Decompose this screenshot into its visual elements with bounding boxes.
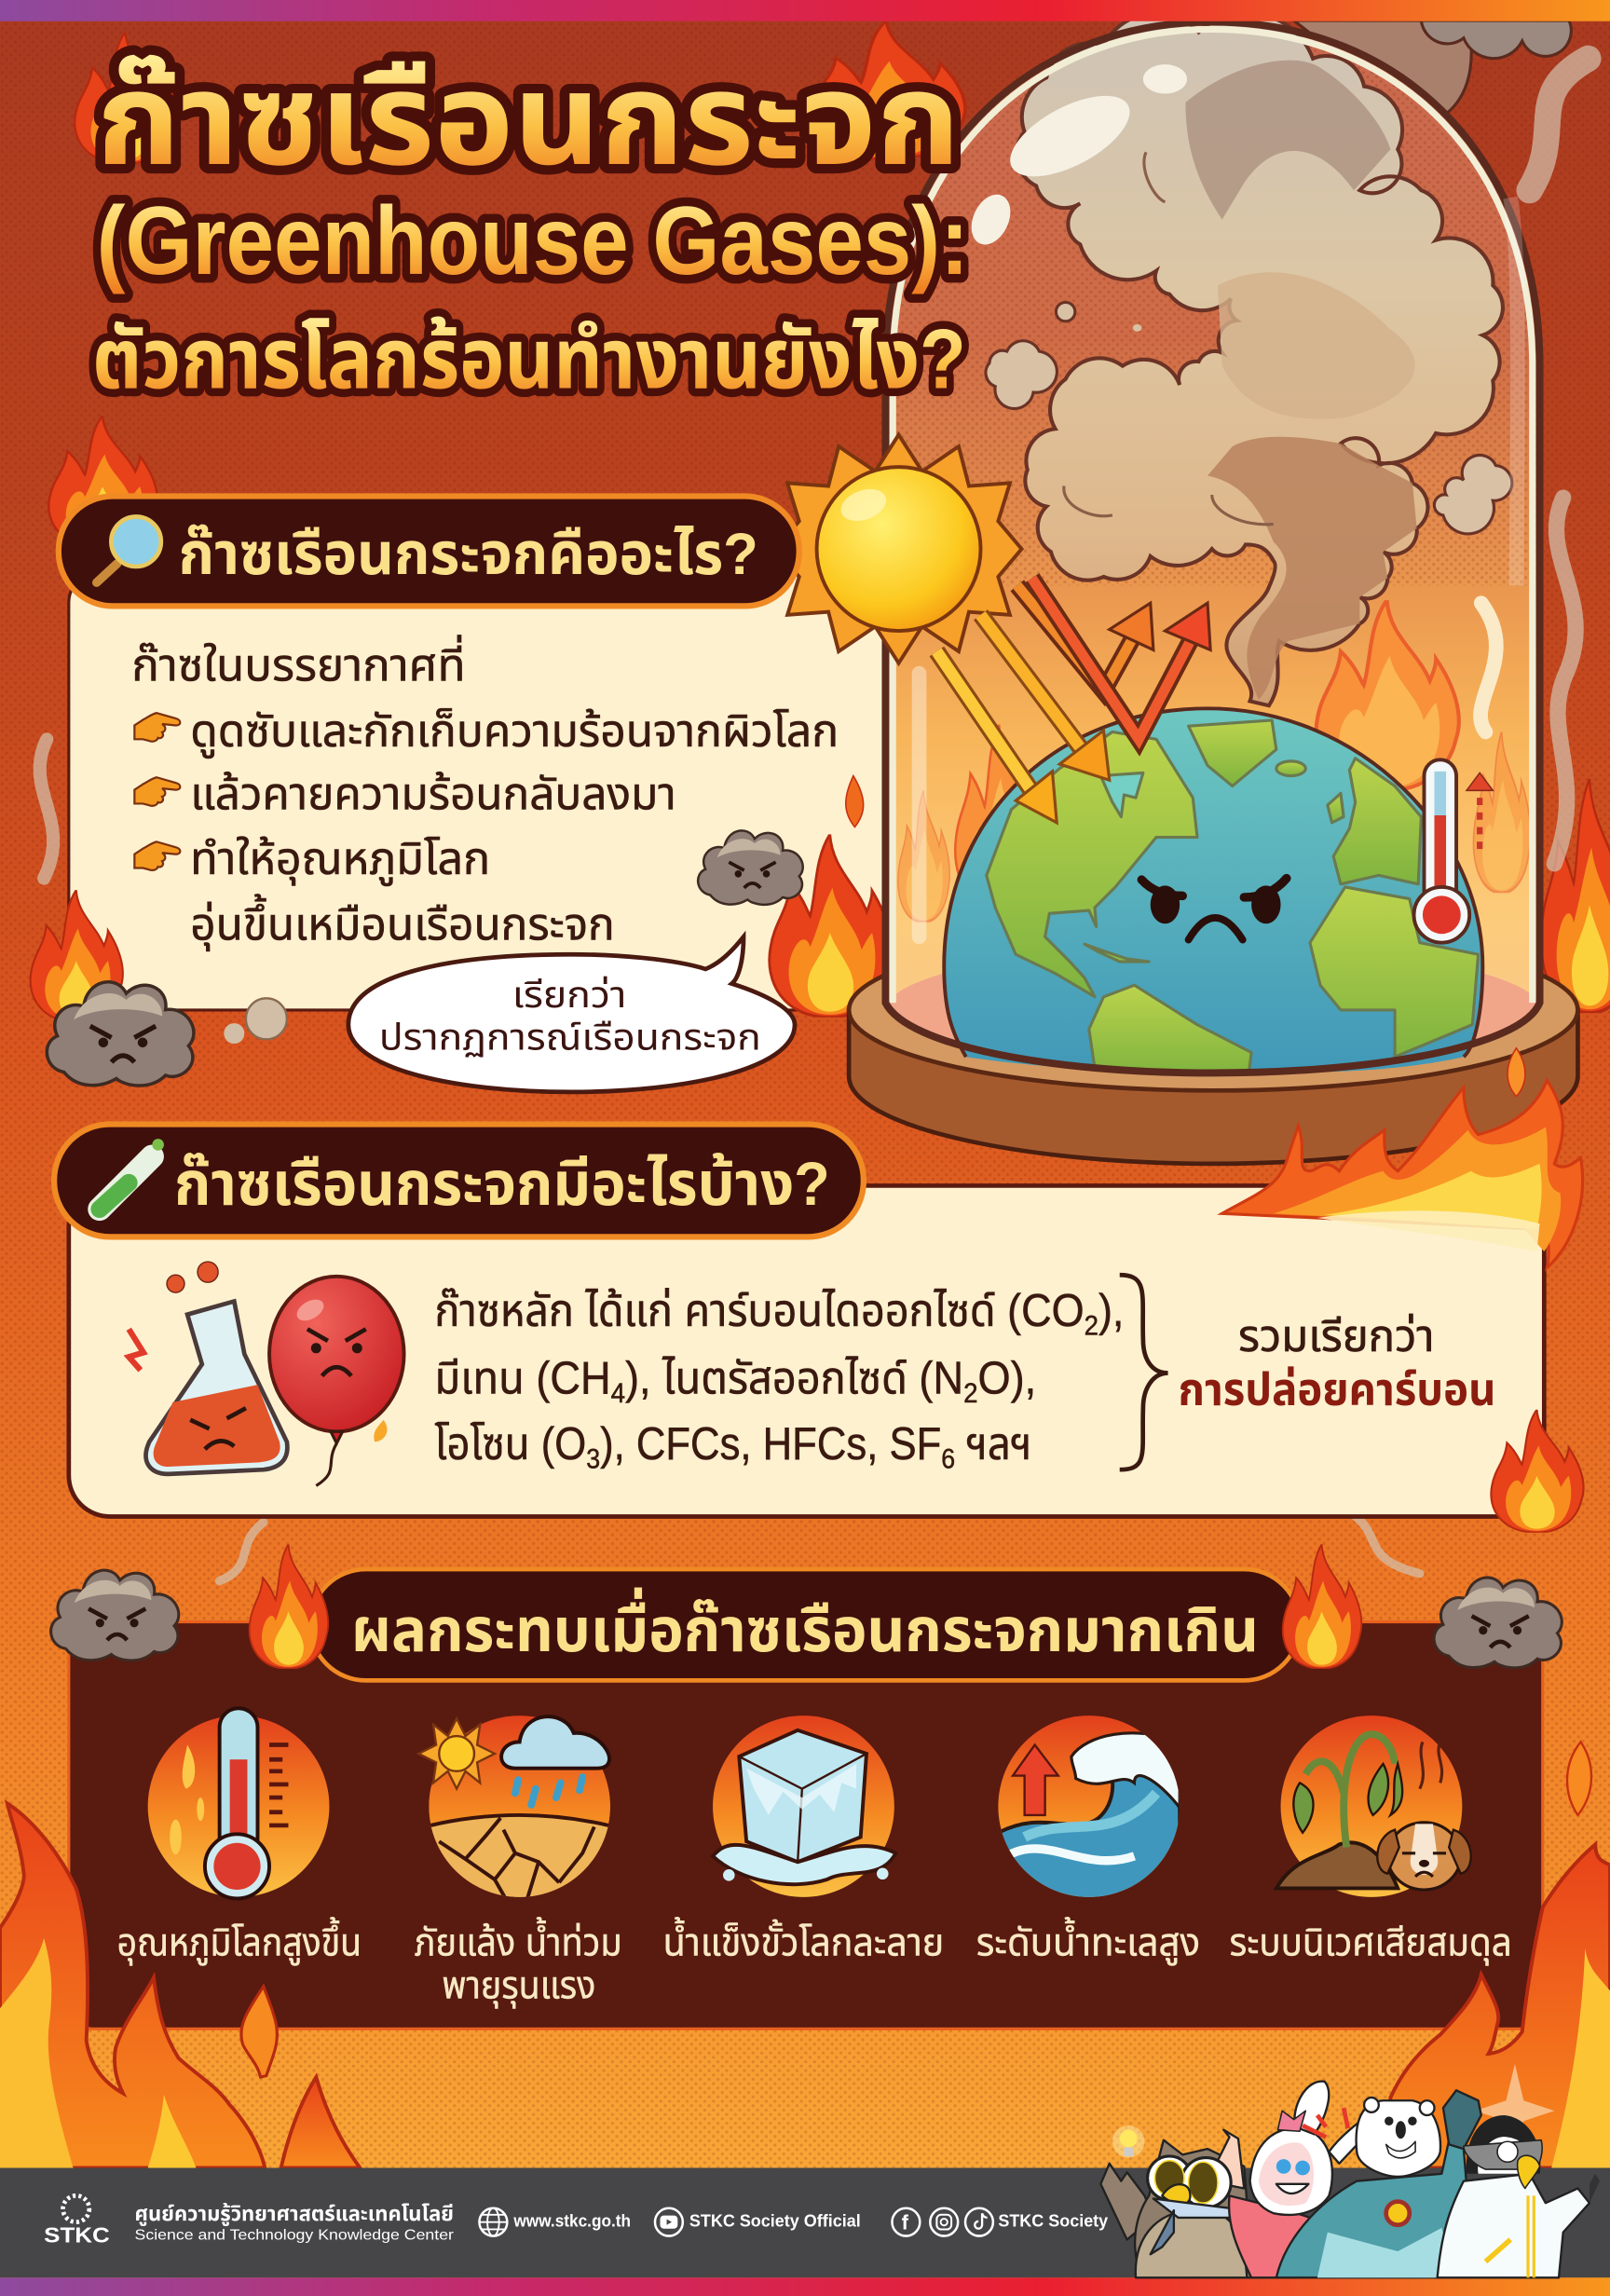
- brace: [1120, 1275, 1168, 1469]
- label: [415, 1917, 622, 2008]
- title: ก๊าซเรือนกระจก: [97, 48, 961, 192]
- mascots: [1100, 2064, 1600, 2277]
- bottom flames: [0, 1742, 1610, 2168]
- arrows: sunlight in, heat out: [936, 579, 1210, 823]
- bullet list: [134, 706, 839, 952]
- text: definition lead: ก๊าซในบรรยากาศที่: [131, 634, 466, 690]
- youtube: [655, 2208, 861, 2236]
- icon: rising sea: [976, 1715, 1200, 1966]
- owl mascot: [1100, 2130, 1253, 2277]
- glass outline: [885, 22, 1540, 1073]
- earth: [936, 703, 1493, 1083]
- icon: magnifier: [97, 517, 161, 582]
- dome interior glass: [885, 22, 1540, 1073]
- flames in front of panel: [31, 776, 892, 1021]
- organisation name: ศูนย์ความรู้วิทยาศาสตร์และเทคโนโลยี: [135, 2202, 454, 2226]
- gas text lines: มีเทน (CH: [435, 1354, 624, 1404]
- organisation name: Science and Technology Knowledge Center: [135, 2227, 454, 2243]
- heading text: ก๊าซเรือนกระจกคืออะไร?: [179, 522, 758, 587]
- speech bubble: [348, 936, 795, 1092]
- icon: wilted plant and puppy: [1230, 1715, 1512, 1966]
- gas text lines: O),: [977, 1354, 1036, 1404]
- heading pill: what is: [59, 497, 799, 606]
- social media: STKC Society: [998, 2210, 1109, 2230]
- flames inside dome: [885, 600, 1541, 1074]
- wooden base: [849, 930, 1577, 1164]
- sparkle star: [1475, 2064, 1554, 2152]
- heading text: ก๊าซเรือนกระจกมีอะไรบ้าง?: [174, 1149, 830, 1218]
- penguin mascot: [1438, 2115, 1600, 2277]
- panel: gases list: การปล่อยคาร์บอน: [1179, 1365, 1495, 1415]
- flames over panel corner: [1222, 1048, 1584, 1533]
- title: ตัวการโลกร้อนทำงานยังไง?: [92, 312, 966, 406]
- label: น้ำแข็งขั้วโลกละลาย: [663, 1917, 944, 1964]
- icon: drought and flood: [415, 1715, 622, 2008]
- bullet list: อุ่นขึ้นเหมือนเรือนกระจก: [190, 894, 615, 952]
- icon: test tube: [100, 1139, 164, 1210]
- thermometer on earth: [1413, 759, 1493, 943]
- title: (Greenhouse Gases):: [97, 186, 969, 294]
- speech bubble: ปรากฏการณ์เรือนกระจก: [379, 1017, 761, 1058]
- label: พายุรุนแรง: [442, 1963, 595, 2008]
- bunny mascot: [1229, 2082, 1369, 2277]
- footer: [0, 2064, 1610, 2296]
- gas text lines: 3: [586, 1444, 600, 1475]
- social media: [892, 2208, 1109, 2236]
- dome halftone: [885, 22, 1540, 585]
- side smoke wisps: [40, 59, 1588, 1581]
- sun: [776, 435, 1021, 663]
- label: ระดับน้ำทะเลสูง: [976, 1917, 1200, 1966]
- label: ระบบนิเวศเสียสมดุล: [1230, 1921, 1512, 1966]
- gas text lines: ), ไนตรัสออกไซด์ (N: [625, 1354, 963, 1404]
- label: ภัยแล้ง น้ำท่วม: [415, 1917, 622, 1964]
- gas text lines: โอโซน (O: [435, 1419, 604, 1469]
- angry clouds: [47, 830, 803, 1086]
- icon: melting ice: [663, 1715, 944, 1964]
- gas text lines: 6: [941, 1444, 955, 1475]
- logo: STKC: [44, 2195, 110, 2248]
- bear mascot: [1276, 2090, 1481, 2277]
- angry clouds beside heading: [51, 1570, 1562, 1668]
- gas text lines: ), CFCs, HFCs, SF: [600, 1419, 941, 1469]
- icon: balloon: [269, 1277, 404, 1485]
- website: [479, 2208, 631, 2236]
- bullet list: ทำให้อุณหภูมิโลก: [190, 834, 490, 886]
- bullet list: ดูดซับและกักเก็บความร้อนจากผิวโลก: [190, 706, 839, 758]
- heading pill: impacts: ผลกระทบเมื่อก๊าซเรือนกระจกมากเกิน: [351, 1587, 1259, 1664]
- gas text lines: [435, 1286, 1124, 1475]
- heading pill: impacts: [310, 1569, 1300, 1680]
- panel: gases list: [69, 1185, 1544, 1516]
- smoke highlights: [963, 64, 1187, 251]
- gas text lines: 2: [963, 1378, 977, 1409]
- summary text: รวมเรียกว่า: [1238, 1311, 1434, 1360]
- speech bubble: เรียกว่า: [512, 975, 626, 1016]
- gas text lines: 4: [611, 1378, 625, 1409]
- panel: what is greenhouse gas: [69, 571, 903, 1010]
- background flames: [48, 20, 1610, 1013]
- smoke behind dome: [1294, 20, 1571, 117]
- panel: impacts: [69, 1622, 1543, 2029]
- top gradient bar: [0, 0, 1610, 21]
- earth face: [1141, 879, 1287, 940]
- icon: thermometer: [117, 1708, 362, 1966]
- organisation name: [135, 2202, 454, 2243]
- title: [92, 48, 969, 406]
- youtube: STKC Society Official: [689, 2210, 861, 2230]
- social media: f: [902, 2210, 909, 2234]
- label: อุณหภูมิโลกสูงขึ้น: [117, 1917, 362, 1966]
- smoke: [963, 13, 1512, 705]
- gas text lines: 2: [1085, 1311, 1098, 1342]
- smoke shading: [1064, 61, 1417, 700]
- heading pill: what gases: [54, 1124, 864, 1237]
- icon: flask: [129, 1262, 287, 1474]
- website: www.stkc.go.th: [512, 2210, 631, 2230]
- earth outline: [944, 708, 1482, 1057]
- logo: STKC: STKC: [44, 2223, 110, 2248]
- land masses: [987, 720, 1479, 1076]
- bullet list: แล้วคายความร้อนกลับลงมา: [190, 770, 676, 820]
- bulb icon: [1112, 2125, 1144, 2158]
- gas text lines: ),: [1098, 1286, 1124, 1336]
- gas text lines: ฯลฯ: [955, 1419, 1031, 1469]
- flames beside heading: [250, 1544, 1361, 1669]
- gas text lines: ก๊าซหลัก ได้แก่ คาร์บอนไดออกไซด์ (CO: [435, 1286, 1138, 1336]
- smoke puffs: [986, 302, 1512, 534]
